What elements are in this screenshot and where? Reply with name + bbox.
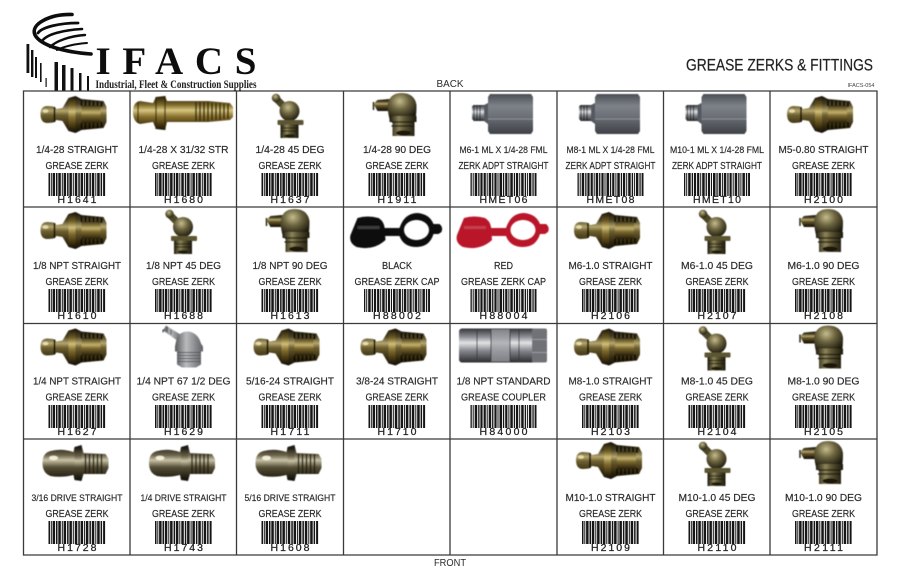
product name: 1/4-28 90 DEG	[363, 144, 431, 156]
cell: HMET06	[458, 94, 549, 206]
barcode: HMET08	[586, 194, 635, 206]
icon: straight zerk	[40, 96, 106, 133]
barcode: H1627	[58, 426, 97, 438]
icon: straight zerk	[574, 212, 640, 249]
barcode: H2105	[804, 426, 843, 438]
barcode: H1711	[270, 426, 310, 438]
icon: straight zerk	[574, 328, 640, 366]
cell: H2110	[678, 442, 756, 554]
front label: FRONT	[434, 557, 467, 569]
cell: H2107	[681, 210, 753, 322]
product name	[788, 376, 860, 404]
product name: GREASE ZERK	[366, 160, 428, 172]
icon: 45 degree zerk	[699, 210, 730, 254]
cell: H1688	[146, 210, 221, 322]
product name	[354, 260, 440, 288]
barcode: H2108	[804, 310, 843, 322]
cell: H84000	[456, 328, 551, 438]
icon: straight zerk	[40, 212, 106, 249]
product name: 1/4 NPT STRAIGHT	[33, 376, 122, 388]
product name: GREASE ZERK	[46, 508, 108, 520]
cell: H1613	[252, 209, 328, 322]
product name: GREASE ZERK	[258, 508, 322, 520]
product name: 1/4 DRIVE STRAIGHT	[140, 492, 227, 503]
product name: M6-1 ML X 1/4-28 FML	[460, 144, 548, 155]
barcode: H84000	[480, 426, 528, 438]
icon: straight zerk	[40, 328, 106, 366]
product name	[566, 492, 656, 520]
barcode: HMET10	[693, 194, 741, 206]
product name: 1/4 NPT 67 1/2 DEG	[136, 376, 230, 388]
product name: M10-1 ML X 1/4-28 FML	[670, 144, 764, 155]
barcode: H1613	[270, 310, 310, 322]
product name	[256, 144, 324, 172]
icon: 45 degree zerk	[272, 94, 304, 138]
product name	[32, 492, 123, 520]
product name	[363, 144, 431, 172]
product name: M10-1.0 90 DEG	[785, 492, 862, 504]
barcode: H88004	[480, 310, 528, 322]
product name: GREASE ZERK	[366, 392, 428, 404]
product name: GREASE ZERK	[46, 160, 108, 172]
icon: 45 degree zerk	[165, 210, 197, 254]
icon: silver 67.5 degree zerk	[163, 326, 203, 368]
product name	[136, 376, 230, 404]
cell: H1743	[140, 445, 227, 554]
product name	[678, 492, 756, 520]
product name: GREASE ZERK	[792, 160, 855, 172]
product name: 1/4-28 X 31/32 STR	[138, 144, 229, 156]
product name	[356, 376, 439, 404]
product name	[244, 492, 336, 520]
barcode: H1637	[270, 194, 310, 206]
product name	[670, 144, 764, 172]
product name: 3/8-24 STRAIGHT	[356, 376, 439, 388]
barcode: H1629	[164, 426, 203, 438]
product name: GREASE ZERK	[152, 160, 215, 172]
barcode: H1743	[164, 542, 203, 554]
product name	[456, 376, 551, 404]
product name	[140, 492, 227, 520]
document code: IFACS-054	[848, 83, 874, 89]
barcode: H2110	[698, 542, 737, 554]
cell: H88002	[350, 213, 442, 322]
cell: H1711	[246, 328, 335, 438]
cell: H2111	[785, 441, 862, 554]
icon: 90 degree zerk	[800, 209, 843, 252]
product name: GREASE ZERK	[686, 508, 748, 520]
product name	[681, 376, 753, 404]
barcode: H1680	[164, 194, 203, 206]
icon: straight zerk	[254, 328, 320, 366]
barcode: H1610	[58, 310, 97, 322]
barcode: H1710	[378, 426, 417, 438]
product name: 5/16-24 STRAIGHT	[246, 376, 335, 388]
cell: H1641	[36, 96, 119, 206]
product name: GREASE ZERK	[686, 276, 748, 288]
product name	[568, 260, 653, 288]
product name: GREASE ZERK	[258, 160, 322, 172]
cell: HMET08	[566, 94, 656, 206]
barcode: H2111	[804, 542, 843, 554]
icon: adapter	[686, 94, 746, 134]
product name: GREASE ZERK	[152, 508, 215, 520]
product name: M10-1.0 45 DEG	[678, 492, 756, 504]
cell: H1728	[32, 445, 123, 554]
icon: adapter	[579, 94, 640, 134]
product name: 1/8 NPT STANDARD	[456, 376, 551, 388]
product name: GREASE ZERK	[579, 276, 642, 288]
product name: M6-1.0 STRAIGHT	[568, 260, 653, 272]
product name: GREASE ZERK	[258, 276, 322, 288]
product name: GREASE ZERK	[579, 392, 642, 404]
product name	[458, 144, 549, 172]
icon: black cap	[350, 213, 442, 248]
cell: HMET10	[670, 94, 764, 206]
cell: H1680	[133, 96, 233, 206]
icon: 90 degree zerk	[800, 326, 843, 368]
product name: 1/4-28 45 DEG	[256, 144, 324, 156]
logo: IFACS	[26, 14, 257, 91]
icon: drive zerk	[256, 445, 322, 481]
cell: H1608	[244, 445, 336, 554]
product name	[33, 376, 122, 404]
icon: straight zerk	[360, 328, 426, 366]
product name: GREASE ZERK	[152, 276, 215, 288]
product name	[246, 376, 335, 404]
cell: H2104	[681, 326, 753, 438]
icon: 90 degree zerk	[266, 209, 310, 252]
cell: H2105	[788, 326, 860, 438]
table grid	[24, 91, 877, 555]
cell: H2108	[788, 209, 860, 322]
icon: logo bars	[26, 44, 89, 91]
product name: ZERK ADPT STRAIGHT	[672, 160, 762, 172]
icon: grease coupler	[459, 328, 547, 362]
cell: H2109	[566, 442, 656, 554]
icon: adapter	[472, 94, 533, 134]
product name: 1/8 NPT 45 DEG	[146, 260, 221, 272]
cell: H2100	[778, 96, 869, 206]
barcode: H88002	[373, 310, 421, 322]
back label: BACK	[436, 78, 464, 90]
product name: GREASE ZERK	[46, 276, 108, 288]
icon: 45 degree zerk	[699, 442, 730, 486]
product name: GREASE ZERK	[792, 508, 855, 520]
product name: GREASE ZERK	[258, 392, 322, 404]
product name: M6-1.0 45 DEG	[681, 260, 753, 272]
product name: M8-1.0 STRAIGHT	[568, 376, 653, 388]
logo wordmark: IFACS	[96, 40, 256, 83]
product name	[138, 144, 229, 172]
product name: 5/16 DRIVE STRAIGHT	[244, 492, 336, 503]
product name: M8-1.0 90 DEG	[788, 376, 860, 388]
product name: 1/8 NPT STRAIGHT	[33, 260, 122, 272]
product name	[33, 260, 122, 288]
product name: 3/16 DRIVE STRAIGHT	[32, 492, 123, 503]
product name: GREASE ZERK	[152, 392, 215, 404]
barcode: H2106	[591, 310, 630, 322]
product name: GREASE ZERK	[46, 392, 108, 404]
product name	[146, 260, 221, 288]
product name: GREASE COUPLER	[461, 392, 546, 404]
product name: ZERK ADPT STRAIGHT	[566, 160, 656, 172]
product name: GREASE ZERK	[792, 392, 855, 404]
barcode: H2103	[591, 426, 630, 438]
cell: H1637	[256, 94, 324, 206]
icon: straight zerk	[576, 442, 642, 479]
barcode: H1608	[270, 542, 310, 554]
product name: M8-1 ML X 1/4-28 FML	[566, 144, 654, 155]
icon: logo arcs	[34, 14, 91, 54]
icon: straight zerk	[787, 96, 853, 133]
product name	[461, 260, 546, 288]
product name: RED	[494, 260, 513, 272]
product name	[788, 260, 860, 288]
cell: H1627	[33, 328, 122, 438]
barcode: HMET06	[480, 194, 528, 206]
barcode: H2109	[591, 542, 630, 554]
product name: GREASE ZERK CAP	[461, 276, 546, 288]
product name	[566, 144, 656, 172]
barcode: H2104	[698, 426, 737, 438]
product name	[681, 260, 753, 288]
cell: H1610	[33, 212, 122, 322]
icon: long zerk	[133, 96, 233, 130]
barcode: H1911	[378, 194, 417, 206]
product name: GREASE ZERK	[579, 508, 642, 520]
barcode: H1641	[58, 194, 97, 206]
product name	[36, 144, 119, 172]
cell: H1911	[363, 93, 431, 206]
product name: GREASE ZERK	[792, 276, 855, 288]
product name	[778, 144, 869, 172]
icon: red cap	[457, 213, 549, 248]
barcode: H2107	[698, 310, 737, 322]
product name: 1/4-28 STRAIGHT	[36, 144, 119, 156]
icon: 45 degree zerk	[699, 326, 730, 370]
product name: GREASE ZERK	[686, 392, 748, 404]
product name: BLACK	[382, 260, 412, 272]
icon: 90 degree zerk	[374, 93, 416, 136]
product name: M5-0.80 STRAIGHT	[778, 144, 869, 156]
product name: M8-1.0 45 DEG	[681, 376, 753, 388]
product name: 1/8 NPT 90 DEG	[252, 260, 328, 272]
barcode: H1728	[58, 542, 97, 554]
cell: H88004	[457, 213, 549, 322]
cell: H2106	[568, 212, 653, 322]
product name: ZERK ADPT STRAIGHT	[458, 160, 549, 172]
cell: H2103	[568, 328, 653, 438]
cell: H1629	[136, 326, 230, 438]
product name: M10-1.0 STRAIGHT	[566, 492, 656, 504]
product name: M6-1.0 90 DEG	[788, 260, 860, 272]
product name: GREASE ZERK CAP	[354, 276, 440, 288]
logo tagline: Industrial, Fleet & Construction Supplies	[96, 79, 257, 91]
product name	[252, 260, 328, 288]
product name	[568, 376, 653, 404]
cell: H1710	[356, 328, 439, 438]
icon: drive zerk	[149, 445, 215, 481]
barcode: H1688	[164, 310, 203, 322]
icon: drive zerk	[42, 445, 108, 481]
icon: 90 degree zerk	[800, 441, 843, 484]
product name	[785, 492, 862, 520]
barcode: H2100	[804, 194, 843, 206]
